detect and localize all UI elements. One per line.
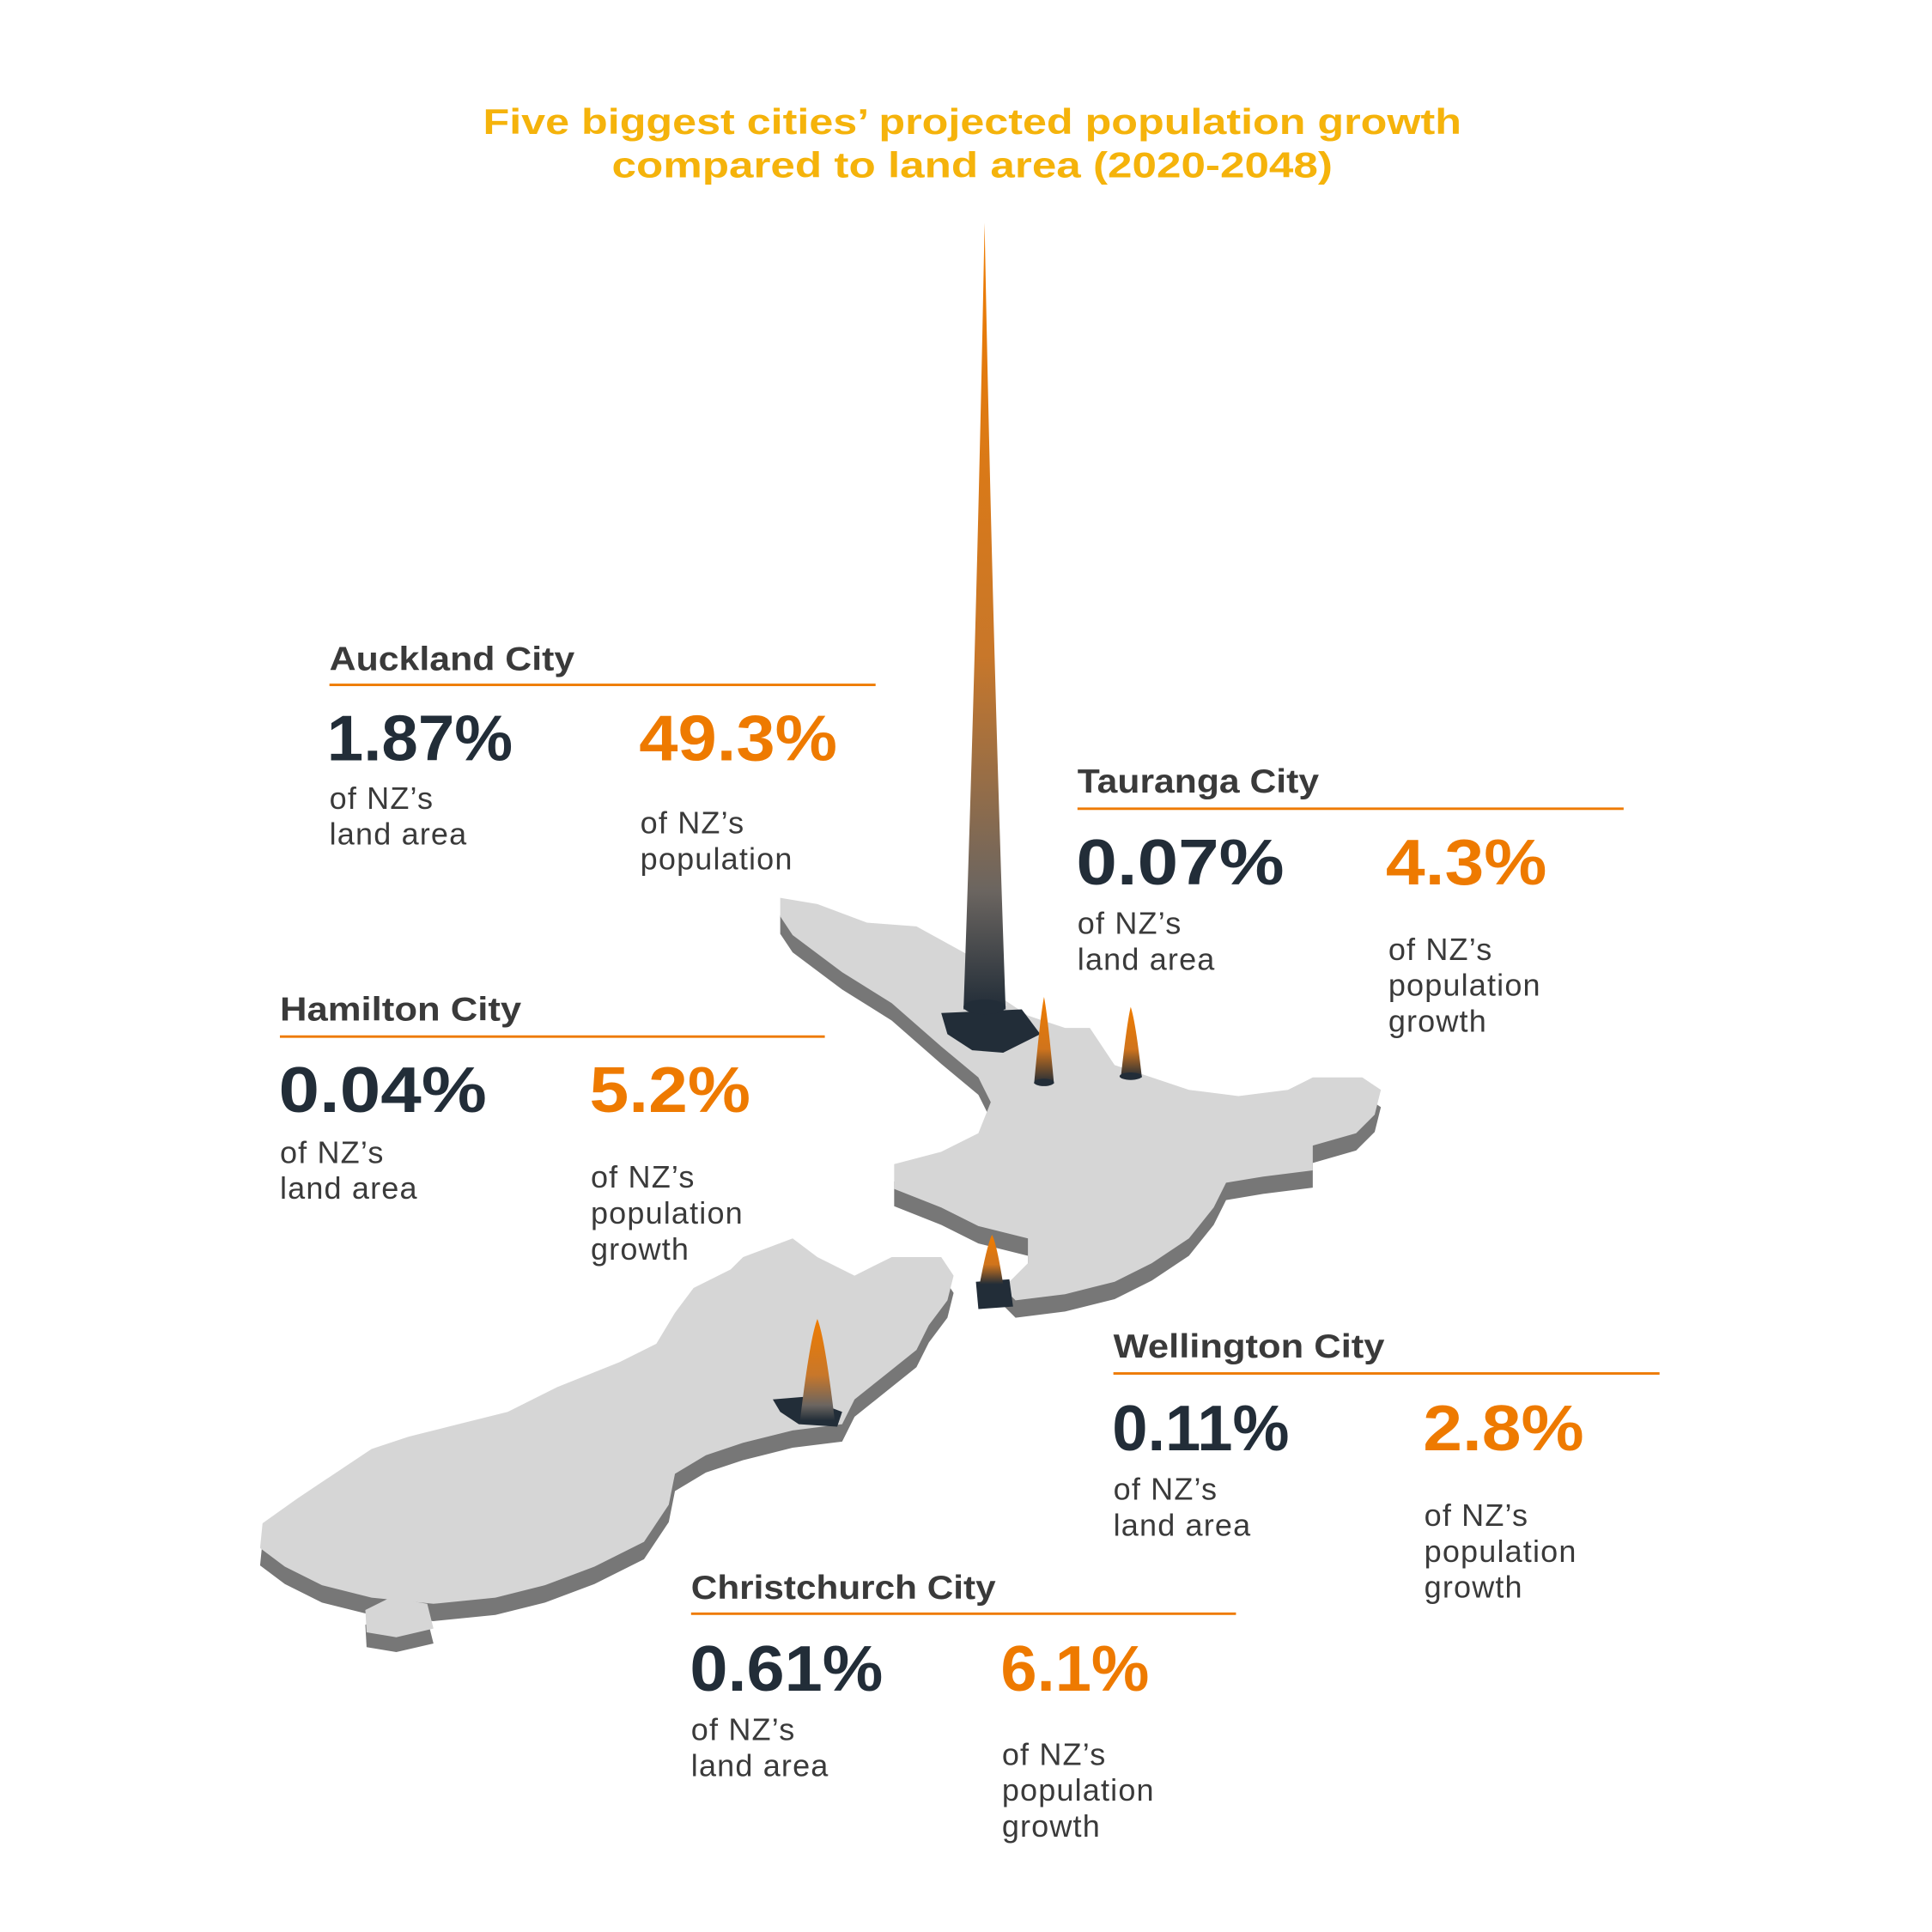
panel: Auckland City: Auckland City <box>330 641 575 677</box>
panel: Christchurch City <box>690 1570 1236 1844</box>
south island <box>260 1238 954 1652</box>
panel: Tauranga City <box>1076 763 1624 1038</box>
panel: Hamilton City: Hamilton City <box>280 991 522 1028</box>
panel: Christchurch City: land area <box>691 1747 829 1783</box>
panel: Auckland City: 1.87% <box>327 702 513 775</box>
panel: Auckland City: land area <box>330 817 467 852</box>
panel: Auckland City: 49.3% <box>639 702 837 775</box>
title: Five biggest cities’ projected population growth <box>483 101 1461 142</box>
panel: Hamilton City: 5.2% <box>590 1054 750 1126</box>
panel: Hamilton City <box>279 991 825 1267</box>
panel: Wellington City: of NZ’s <box>1114 1472 1218 1507</box>
panel: Tauranga City: land area <box>1078 941 1216 976</box>
panel: Tauranga City: population <box>1388 968 1541 1003</box>
panel: Hamilton City: population <box>591 1195 744 1230</box>
panel: Wellington City: growth <box>1425 1570 1523 1605</box>
panel: Hamilton City: 0.04% <box>279 1054 487 1126</box>
spike: Hamilton <box>1034 997 1054 1086</box>
panel: Wellington City: 2.8% <box>1423 1392 1584 1464</box>
panel: Christchurch City: 6.1% <box>1000 1632 1149 1704</box>
panel: Auckland City: of NZ’s <box>641 805 744 841</box>
spike: Wellington <box>976 1235 1013 1309</box>
panel: Tauranga City: of NZ’s <box>1078 905 1182 940</box>
panel: Wellington City: Wellington City <box>1114 1328 1385 1365</box>
title <box>483 101 1461 185</box>
panel: Hamilton City: growth <box>591 1231 690 1267</box>
spike: Christchurch <box>773 1319 842 1427</box>
panel: Wellington City: land area <box>1114 1507 1251 1542</box>
spike: Tauranga <box>1120 1007 1142 1080</box>
panel: Tauranga City: 0.07% <box>1076 826 1285 898</box>
panel: Wellington City: 0.11% <box>1112 1392 1289 1464</box>
panel: Tauranga City: 4.3% <box>1386 826 1546 898</box>
spike: Auckland <box>941 223 1041 1053</box>
panel: Christchurch City: population <box>1002 1772 1155 1807</box>
panel: Tauranga City: Tauranga City <box>1078 763 1319 800</box>
title: compared to land area (2020-2048) <box>611 144 1333 185</box>
panel: Christchurch City: of NZ’s <box>1002 1736 1106 1771</box>
panel: Wellington City: of NZ’s <box>1425 1498 1528 1533</box>
panel: Tauranga City: growth <box>1388 1003 1487 1038</box>
panel: Wellington City <box>1112 1328 1660 1605</box>
north island <box>781 898 1381 1318</box>
panel: Hamilton City: of NZ’s <box>591 1159 696 1194</box>
panel: Wellington City: population <box>1425 1534 1577 1569</box>
panel: Hamilton City: land area <box>280 1170 418 1206</box>
panel: Tauranga City: of NZ’s <box>1388 932 1492 967</box>
panel: Auckland City <box>327 641 876 876</box>
panel: Christchurch City: Christchurch City <box>691 1570 996 1607</box>
panel: Auckland City: of NZ’s <box>330 781 434 816</box>
panel: Hamilton City: of NZ’s <box>280 1134 385 1170</box>
panel: Christchurch City: 0.61% <box>690 1632 883 1704</box>
panel: Christchurch City: of NZ’s <box>691 1711 795 1747</box>
panel: Auckland City: population <box>641 841 793 876</box>
map of New Zealand <box>260 898 1381 1652</box>
panel: Christchurch City: growth <box>1002 1808 1101 1844</box>
